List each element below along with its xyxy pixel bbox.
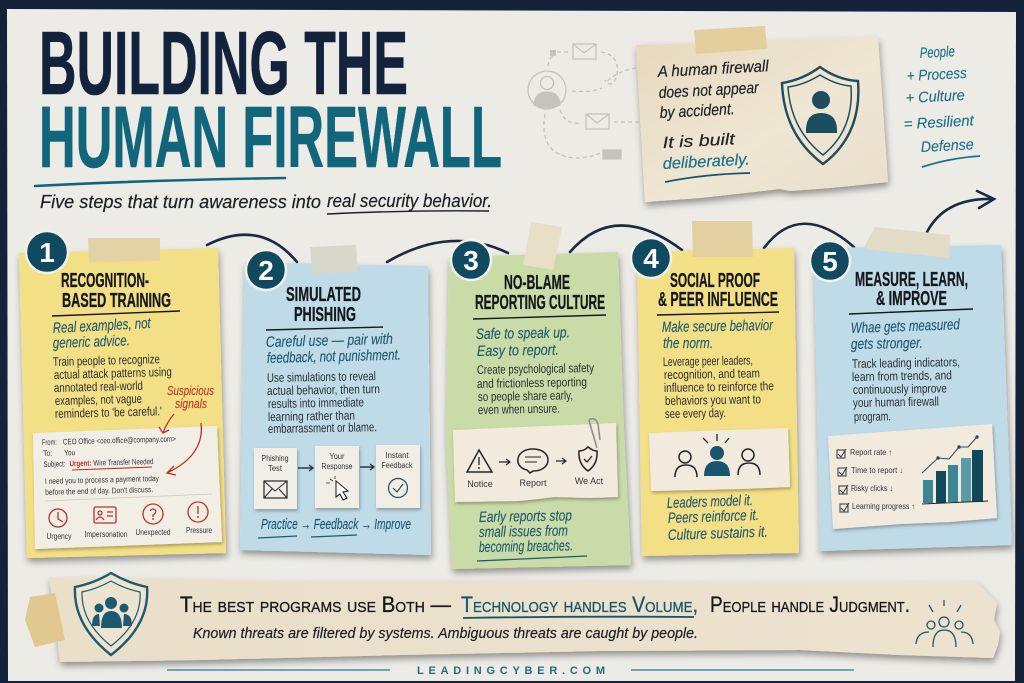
icon labels: Urgency — [46, 532, 72, 541]
note paper — [240, 262, 431, 555]
closing note: Leaders model it. — [667, 492, 753, 512]
heading: & IMPROVE — [876, 288, 947, 310]
panel: bottom banner — [25, 573, 1000, 662]
body text: Train people to recognize — [53, 352, 160, 369]
heading — [657, 270, 779, 315]
panel: step 3 — [446, 222, 631, 569]
flow: instant feedback — [376, 445, 420, 508]
tape — [25, 593, 65, 647]
icon: team with rays — [916, 600, 973, 647]
callout: suspicious signals: signals — [175, 396, 207, 411]
arrows between steps — [298, 464, 374, 471]
icon: notice triangle — [467, 450, 493, 489]
icon: notice triangle: Notice — [467, 479, 493, 489]
footer: LEADINGCYBER.COM — [417, 665, 605, 677]
body text: actual attack patterns using — [54, 365, 172, 382]
title: BUILDING THE — [39, 14, 408, 114]
metrics checklist — [837, 448, 915, 512]
email sample card: CEO Office <ceo.office@company.com> — [63, 434, 176, 446]
body text: and frictionless reporting — [477, 375, 587, 391]
step badge: 5 — [822, 246, 838, 277]
closing note: Culture sustains it. — [668, 524, 768, 544]
heading — [473, 272, 606, 319]
note text: It is built — [662, 131, 736, 152]
body text: influence to reinforce the — [664, 379, 774, 395]
tagline: the norm. — [663, 335, 713, 352]
heading: BASED TRAINING — [62, 290, 171, 312]
arrow: journey connector — [207, 191, 994, 262]
tape — [310, 245, 358, 274]
icon: paperclip — [589, 419, 600, 448]
panel: human firewall note — [636, 26, 888, 202]
icon: we act shield: We Act — [575, 476, 604, 486]
arrows between icons — [499, 458, 566, 465]
tagline — [266, 331, 401, 367]
key message: Technology handles Volume, — [461, 592, 698, 617]
handwritten equation — [903, 43, 980, 167]
note text: by accident. — [659, 101, 735, 122]
flow: instant feedback: Instant — [386, 451, 409, 460]
metrics checklist: Learning progress ↑ — [852, 502, 915, 511]
tape — [692, 221, 753, 257]
handwritten equation: Defense — [920, 136, 974, 156]
callout: suspicious signals: Suspicious — [167, 383, 214, 398]
title: HUMAN FIREWALL — [39, 89, 502, 186]
note paper — [814, 245, 1012, 551]
body text: reminders to 'be careful.' — [55, 404, 162, 421]
flow caption — [258, 516, 411, 538]
sketch: grey attack flow diagram — [528, 44, 640, 159]
heading: SIMULATED — [286, 284, 361, 306]
step badge — [451, 240, 491, 280]
body text: Create psychological safety — [477, 361, 595, 377]
handwritten equation: People — [919, 43, 955, 62]
email sample card: To: — [43, 449, 52, 458]
email sample card: You — [64, 448, 75, 457]
subtitle with underlines: Five steps that turn awareness into — [40, 192, 321, 212]
panel: step 1 — [19, 231, 226, 558]
flow caption: Practice → Feedback → Improve — [261, 516, 411, 533]
email sample card: Urgent: — [69, 459, 92, 468]
body text — [852, 355, 960, 424]
email sample card: Subject: — [43, 459, 66, 469]
closing note — [477, 507, 587, 561]
body text: continuously improve — [853, 381, 947, 397]
step badge — [631, 238, 671, 278]
body text: Use simulations to reveal — [267, 369, 376, 385]
icon: we act shield — [575, 447, 604, 486]
flow: instant feedback: Feedback — [382, 461, 413, 470]
torn note paper — [636, 37, 888, 202]
heading: SOCIAL PROOF — [670, 270, 760, 292]
tagline: Easy to report. — [477, 342, 559, 360]
note paper — [446, 252, 631, 569]
tape — [523, 222, 562, 270]
heading: RECOGNITION- — [61, 270, 149, 292]
body text: your human firewall — [853, 395, 939, 410]
tagline — [851, 316, 961, 353]
body text: program. — [854, 409, 891, 424]
tagline: generic advice. — [53, 332, 130, 352]
body text — [663, 353, 774, 421]
arrows: red annotations — [159, 414, 201, 475]
heading — [266, 284, 383, 330]
step badge: 2 — [258, 255, 274, 286]
heading: & PEER INFLUENCE — [658, 289, 778, 311]
handwritten equation: + Process — [906, 65, 968, 85]
metrics checklist: Report rate ↑ — [850, 448, 892, 457]
tagline — [476, 324, 570, 360]
email sample card: Wire Transfer Needed — [93, 457, 154, 468]
step badge — [810, 241, 850, 281]
icon labels: Impersonation — [84, 530, 128, 539]
body text: embarrassment or blame. — [268, 420, 377, 436]
title — [39, 14, 502, 186]
body text: annotated real-world — [54, 379, 143, 395]
tape — [694, 26, 767, 54]
icon labels — [46, 526, 212, 541]
handwritten equation: = Resilient — [903, 112, 975, 133]
flow: your response — [315, 446, 359, 508]
tape — [88, 238, 160, 262]
step badge: 3 — [463, 245, 479, 276]
flow: phishing test — [254, 448, 297, 509]
icon: report bubble — [518, 449, 548, 488]
heading: PHISHING — [294, 304, 356, 326]
email sample card: From: — [42, 438, 57, 447]
supporting text: Known threats are filtered by systems. Ambiguous threats are caught by people. — [193, 625, 698, 642]
body text: recognition, and team — [664, 366, 760, 382]
step badge: 1 — [39, 237, 55, 268]
torn banner paper — [49, 577, 1000, 662]
body text — [267, 369, 380, 436]
email sample card: before the end of day. Don't discuss. — [45, 485, 153, 497]
tagline: gets stronger. — [851, 335, 923, 353]
heading — [52, 270, 180, 316]
email sample card: I need you to process a payment today — [45, 474, 159, 486]
panel: step 4 — [631, 221, 799, 556]
key message: People handle Judgment. — [710, 592, 910, 617]
icon: shield with person — [782, 67, 858, 164]
closing note: becoming breaches. — [479, 537, 573, 556]
panel: step 5 — [810, 227, 1012, 551]
icon: report bubble: Report — [519, 478, 547, 488]
body text: results into immediate — [268, 395, 364, 411]
body text: so people share early, — [478, 388, 573, 404]
tagline: Real examples, not — [52, 315, 152, 337]
closing note: small issues from — [479, 522, 568, 541]
step badge: 4 — [643, 243, 659, 274]
body text — [477, 361, 595, 417]
body text: examples, not vague — [55, 392, 142, 408]
closing note: Early reports stop — [479, 507, 572, 526]
note text — [656, 58, 769, 182]
tape — [864, 227, 950, 258]
tagline: Careful use — pair with — [266, 331, 393, 351]
body text: learn from trends, and — [852, 368, 952, 384]
flow: phishing test: Phishing — [262, 454, 288, 463]
flow: your response: Response — [322, 462, 353, 471]
tagline: Make secure behavior — [662, 317, 774, 336]
body text: learning rather than — [268, 408, 355, 424]
flow: phishing test: Test — [268, 464, 283, 473]
tagline: Safe to speak up. — [476, 324, 570, 343]
body text: Leverage peer leaders, — [663, 353, 753, 369]
key message — [180, 592, 910, 618]
heading — [849, 269, 973, 314]
email sample card — [33, 426, 222, 549]
body text: behaviors you want to — [665, 392, 761, 408]
tagline — [52, 315, 152, 352]
tagline: feedback, not punishment. — [267, 346, 401, 367]
note paper — [19, 248, 226, 558]
step badge — [26, 231, 68, 273]
subtitle with underlines: real security behavior. — [327, 191, 492, 211]
heading: NO-BLAME — [504, 272, 570, 294]
body text: even when unsure. — [478, 402, 560, 417]
metrics checklist: Time to report ↓ — [851, 466, 903, 475]
icon: peer group — [675, 434, 760, 477]
subtitle with underlines — [35, 178, 492, 214]
key message: The best programs use Both — — [180, 592, 451, 617]
panel: step 2 — [240, 245, 431, 555]
tagline — [662, 317, 774, 352]
icon labels: Pressure — [186, 526, 212, 535]
handwritten equation: + Culture — [905, 87, 965, 107]
step badge — [246, 250, 286, 290]
body text — [53, 352, 172, 421]
icon labels: Unexpected — [136, 528, 170, 537]
note paper — [637, 248, 799, 556]
callout: suspicious signals — [167, 383, 214, 411]
closing note: Peers reinforce it. — [668, 507, 759, 527]
icons: warning signs — [49, 502, 208, 527]
torn paper flow card — [453, 423, 618, 502]
closing note — [667, 492, 768, 544]
body text: actual behavior, then turn — [267, 382, 380, 398]
torn paper card — [649, 428, 790, 491]
icon: shield with team — [75, 573, 147, 655]
note text: A human firewall — [656, 58, 769, 81]
heading: REPORTING CULTURE — [475, 292, 605, 314]
note text: does not appear — [658, 80, 760, 102]
note text: deliberately. — [662, 151, 750, 173]
flow: your response: Your — [330, 452, 345, 461]
torn paper metrics card — [828, 424, 997, 529]
tagline: Whae gets measured — [851, 316, 961, 337]
body text: see every day. — [665, 406, 726, 421]
body text: Track leading indicators, — [852, 355, 960, 371]
metrics checklist: Risky clicks ↓ — [851, 484, 893, 493]
bar chart with trend line — [922, 435, 988, 504]
